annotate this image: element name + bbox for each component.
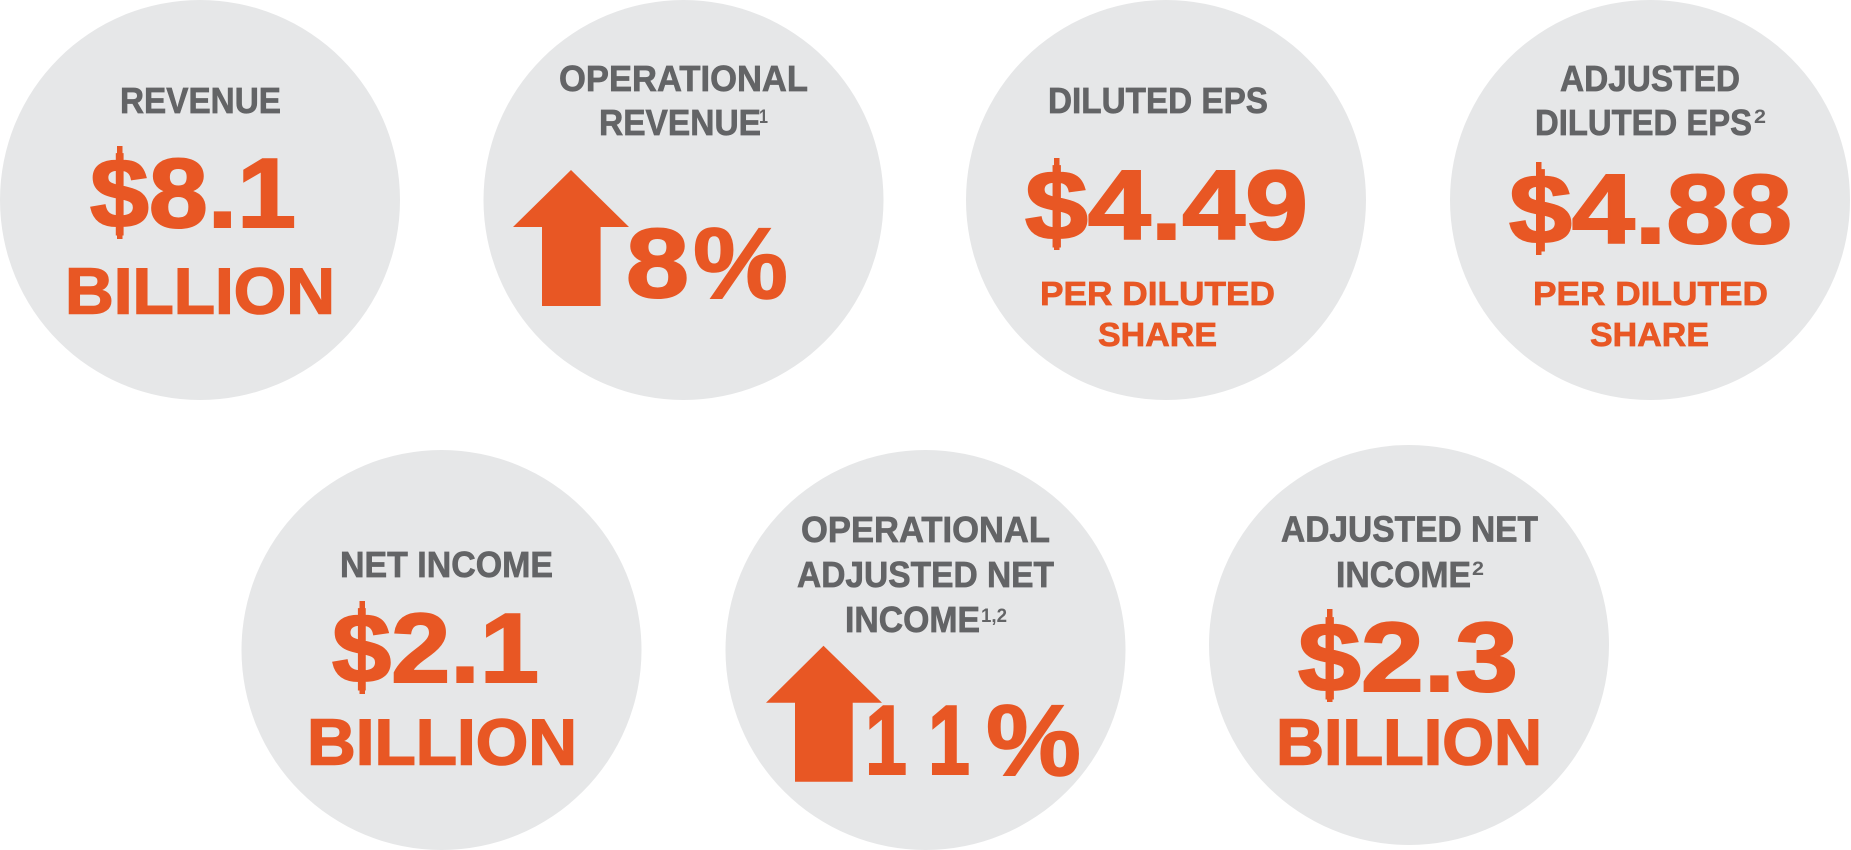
heading: adjusted net income: ADJUSTED NET	[1281, 508, 1538, 550]
panel: revenue	[0, 0, 400, 400]
unit: per diluted share	[1533, 275, 1768, 353]
value: 11%: 1	[928, 685, 970, 795]
heading: operational adjusted net income: INCOME	[845, 599, 980, 640]
unit: per diluted share: SHARE	[1098, 316, 1217, 353]
heading: revenue: REVENUE	[120, 80, 281, 121]
panel background circle	[1450, 0, 1850, 400]
unit: per diluted share: PER DILUTED	[1533, 275, 1768, 312]
heading: adjusted diluted EPS: 2	[1754, 107, 1766, 128]
panel: net income	[242, 450, 642, 850]
heading: operational revenue: 1	[759, 107, 768, 128]
icon: up arrow	[766, 646, 882, 782]
unit: per diluted share	[1040, 275, 1275, 353]
value: 8%: 8	[626, 208, 689, 318]
panel: adjusted net income	[1209, 445, 1609, 845]
value: 11%	[865, 685, 1081, 797]
value: $2.1: $2.1	[332, 593, 539, 703]
panel background circle	[726, 450, 1126, 850]
value: $4.49: $4.49	[1025, 150, 1308, 260]
panel: operational revenue	[484, 0, 884, 400]
heading: adjusted net income: INCOME	[1336, 554, 1471, 595]
icon: up arrow	[513, 170, 629, 306]
heading: adjusted net income	[1281, 508, 1538, 595]
unit: billion: BILLION	[307, 706, 577, 778]
panel background circle	[484, 0, 884, 400]
unit: billion: BILLION	[65, 254, 335, 328]
heading: diluted EPS: DILUTED EPS	[1048, 80, 1268, 121]
value: 8%: %	[693, 208, 788, 320]
heading: operational adjusted net income: OPERATIONAL	[801, 509, 1050, 550]
unit: per diluted share: SHARE	[1590, 316, 1709, 353]
panel: adjusted diluted EPS	[1450, 0, 1850, 400]
value: $2.3: $2.3	[1298, 602, 1518, 712]
value: 8%	[626, 208, 788, 320]
heading: adjusted diluted EPS: DILUTED EPS	[1535, 102, 1752, 143]
heading: operational revenue	[559, 58, 808, 143]
panel: diluted EPS	[966, 0, 1366, 400]
value: 11%: 1	[865, 685, 907, 795]
heading: adjusted net income: 2	[1472, 559, 1484, 580]
panel background circle	[242, 450, 642, 850]
value: $4.88: $4.88	[1509, 154, 1792, 264]
heading: operational revenue: OPERATIONAL	[559, 58, 808, 99]
value: 11%: %	[986, 685, 1081, 797]
unit: per diluted share: PER DILUTED	[1040, 275, 1275, 312]
panel background circle	[1209, 445, 1609, 845]
unit: billion: BILLION	[1276, 706, 1542, 778]
heading: operational adjusted net income	[797, 509, 1054, 640]
value: $8.1: $8.1	[90, 138, 296, 248]
panel background circle	[966, 0, 1366, 400]
heading: adjusted diluted EPS: ADJUSTED	[1560, 58, 1740, 99]
heading: operational revenue: REVENUE	[599, 102, 761, 143]
panel background circle	[0, 0, 400, 400]
heading: adjusted diluted EPS	[1535, 58, 1766, 143]
heading: net income: NET INCOME	[340, 544, 553, 585]
heading: operational adjusted net income: 1,2	[981, 606, 1007, 627]
heading: operational adjusted net income: ADJUSTED NET	[797, 554, 1054, 595]
panel: operational adjusted net income	[726, 450, 1126, 850]
